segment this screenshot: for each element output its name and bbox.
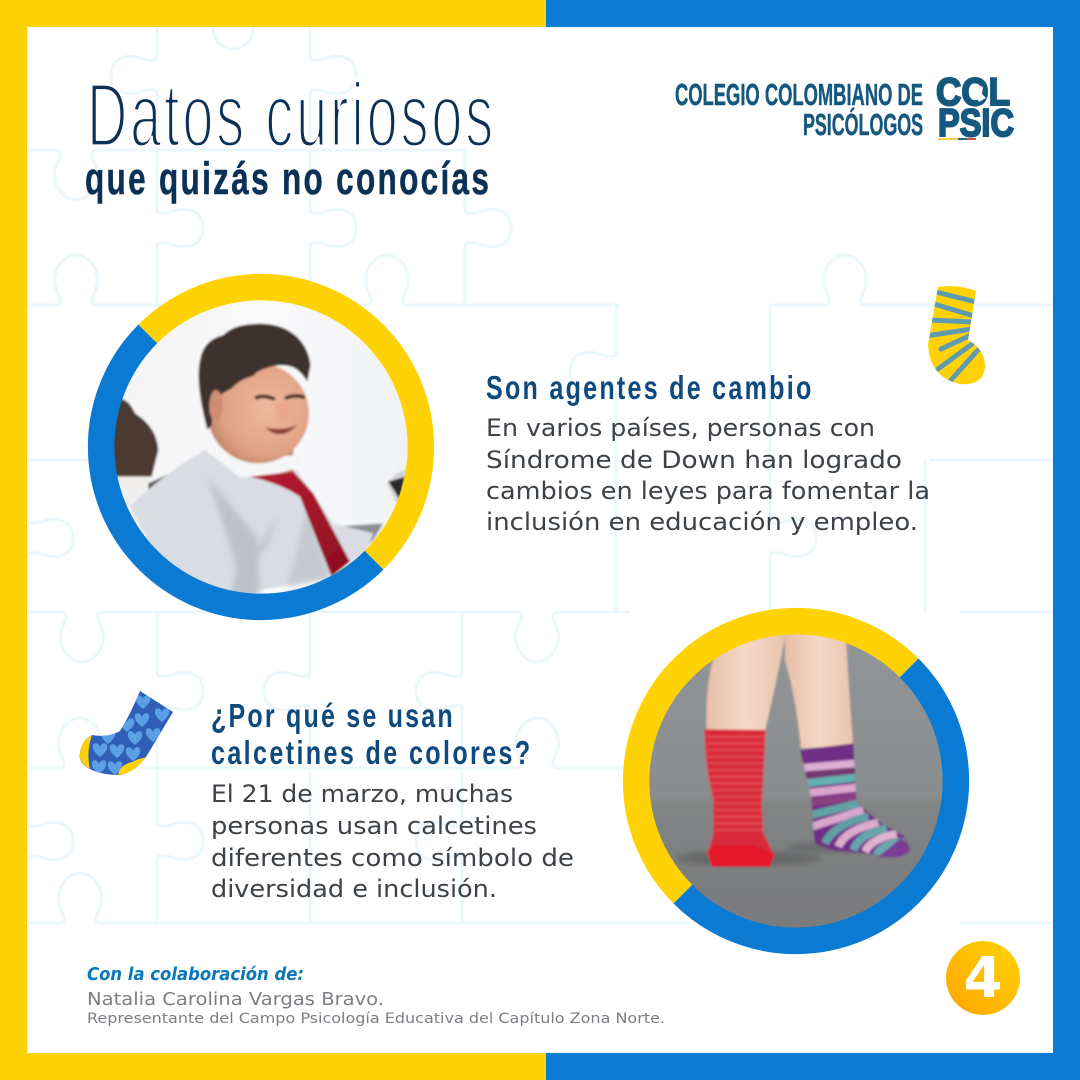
text block: agentes de cambio: En varios países, personas con	[486, 414, 875, 442]
photo ring: mismatched socks	[615, 600, 980, 960]
photo: child legs with red and striped socks	[649, 634, 943, 928]
credits: Representante del Campo Psicología Educativa del Capítulo Zona Norte.	[87, 1011, 665, 1027]
logo: Colegio Colombiano de Psicólogos	[675, 71, 1014, 145]
subtitle: que quizás no conocías	[85, 155, 489, 204]
icon: yellow striped sock	[926, 286, 985, 384]
text block: agentes de cambio: cambios en leyes para fomentar la	[486, 477, 930, 505]
page number badge	[946, 941, 1020, 1015]
ring: yellow half	[636, 621, 909, 894]
text block: agentes de cambio: Síndrome de Down han logrado	[486, 446, 902, 474]
ring: blue half	[101, 334, 374, 607]
page number badge: 4	[964, 946, 1002, 1011]
ring: blue half	[683, 668, 956, 941]
photo: smiling man in shirt and red tie	[114, 304, 408, 594]
text block: calcetines de colores	[211, 698, 574, 903]
text block: agentes de cambio	[486, 370, 930, 536]
text block: agentes de cambio: Son agentes de cambio	[486, 370, 811, 407]
text block: calcetines de colores: El 21 de marzo, muchas	[211, 780, 513, 808]
logo: Colegio Colombiano de Psicólogos: PSIC	[938, 102, 1014, 145]
photo ring: man with tie	[80, 270, 450, 630]
credits	[87, 965, 665, 1027]
icon: blue sock with hearts	[80, 691, 173, 775]
logo: Colegio Colombiano de Psicólogos: COL	[936, 71, 1010, 114]
text block: calcetines de colores: calcetines de colores?	[211, 735, 530, 772]
text block: agentes de cambio: inclusión en educación y empleo.	[486, 508, 918, 536]
credits: Con la colaboración de:	[87, 965, 304, 985]
ring: yellow half	[148, 287, 421, 560]
text block: calcetines de colores: personas usan calcetines	[211, 812, 537, 840]
text block: calcetines de colores: diversidad e inclusión.	[211, 875, 497, 903]
credits: Natalia Carolina Vargas Bravo.	[87, 990, 384, 1010]
text block: calcetines de colores: ¿Por qué se usan	[211, 698, 453, 735]
title: Datos curiosos	[87, 64, 493, 165]
logo: Colegio Colombiano de Psicólogos: PSICÓLOGOS	[803, 106, 923, 142]
text block: calcetines de colores: diferentes como símbolo de	[211, 844, 574, 872]
